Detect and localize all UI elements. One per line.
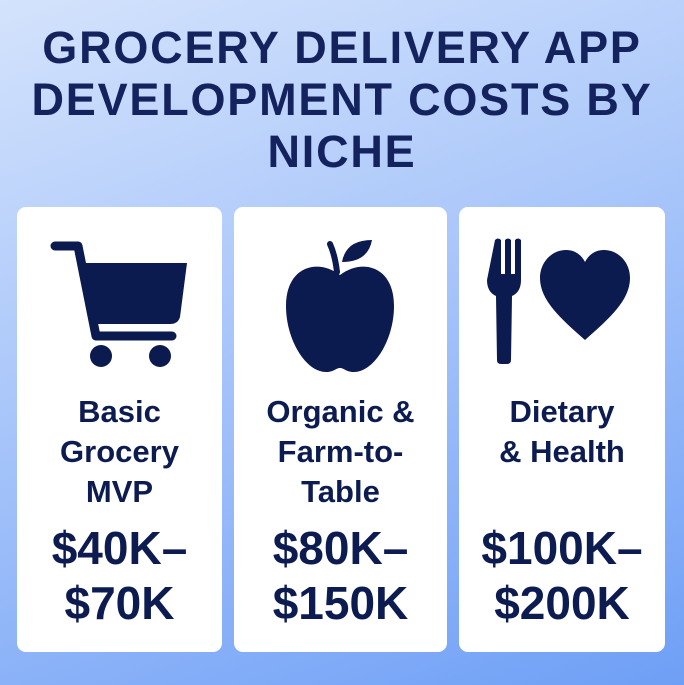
price: $70K <box>65 577 174 629</box>
label: Farm-to- <box>278 434 403 469</box>
label: Organic & <box>266 394 415 429</box>
price: $80K– <box>273 522 408 574</box>
icon: fork and heart <box>487 238 630 364</box>
label <box>499 394 625 469</box>
price <box>273 522 408 629</box>
title <box>31 22 653 177</box>
label: Dietary <box>509 394 615 429</box>
label <box>266 394 415 509</box>
price: $200K <box>494 577 630 629</box>
label: Table <box>301 474 380 509</box>
icon: apple <box>286 240 394 372</box>
icon: shopping cart <box>50 242 187 367</box>
label: Basic <box>78 394 161 429</box>
label: MVP <box>86 474 153 509</box>
label <box>60 394 179 509</box>
panel: basic grocery <box>17 207 222 652</box>
price <box>52 522 187 629</box>
price <box>481 522 643 629</box>
price: $100K– <box>481 522 643 574</box>
title: NICHE <box>267 126 416 177</box>
label: & Health <box>499 434 625 469</box>
title: GROCERY DELIVERY APP <box>42 22 642 73</box>
panel: dietary <box>459 207 665 652</box>
panel: organic <box>234 207 447 652</box>
price: $40K– <box>52 522 187 574</box>
title: DEVELOPMENT COSTS BY <box>31 74 653 125</box>
price: $150K <box>273 577 408 629</box>
label: Grocery <box>60 434 179 469</box>
